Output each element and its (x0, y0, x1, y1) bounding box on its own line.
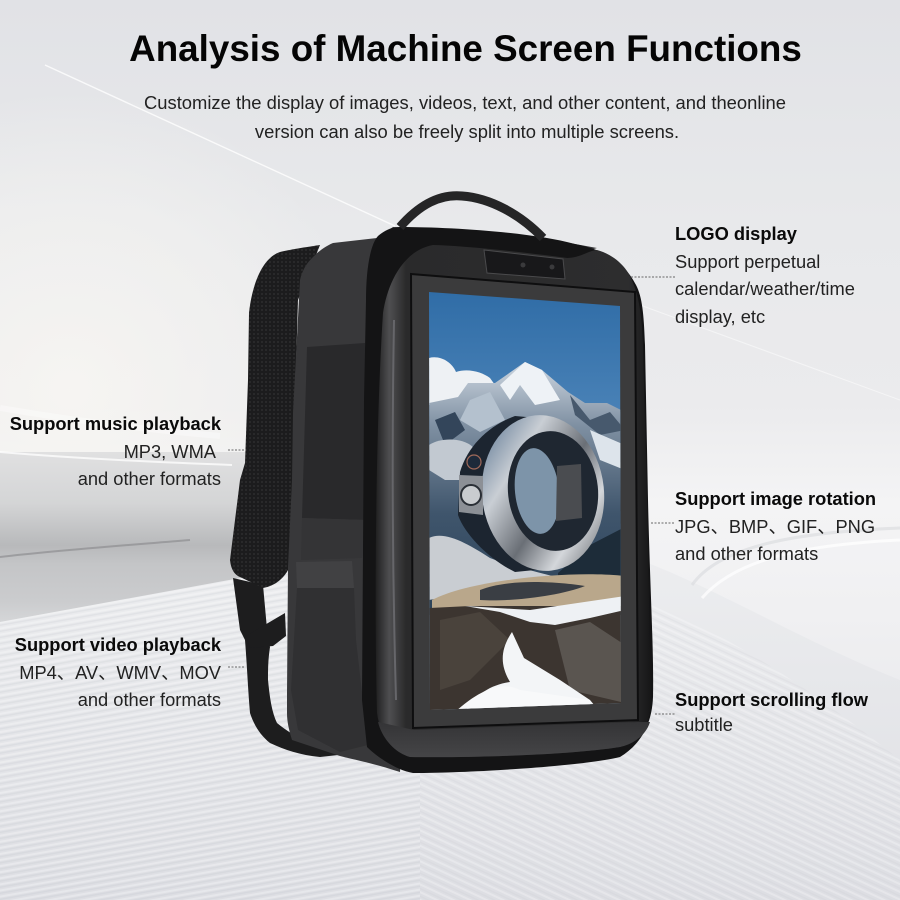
icon: lower straps (233, 578, 338, 757)
clouds (429, 357, 495, 405)
icon: bottom shell highlight (378, 722, 650, 757)
callout: logo display: LOGO display (675, 223, 797, 244)
icon: side strap tab (296, 561, 354, 588)
icon: front hard shell (376, 245, 651, 757)
panel: screen bezel (411, 274, 638, 728)
dark inner ring (502, 427, 604, 555)
callout: music playback: Support music playback (10, 413, 221, 434)
icon: soft side body (287, 227, 597, 772)
subtitle (144, 92, 786, 142)
callout: image rotation (675, 488, 876, 564)
subtitle: Customize the display of images, videos, text, and other content, and theonline (144, 92, 786, 113)
icon: reflection highlight on shell (393, 320, 396, 700)
subtitle: version can also be freely split into multiple screens. (255, 121, 679, 142)
icon: outer shell edge (362, 227, 653, 773)
callout: video playback: MP4、AV、WMV、MOV (19, 662, 221, 682)
callout: image rotation: JPG、BMP、GIF、PNG (675, 516, 875, 536)
callout: logo display: calendar/weather/time (675, 278, 855, 299)
callout: video playback: and other formats (78, 689, 221, 710)
rock (429, 606, 625, 715)
icon: logo display strip (484, 250, 565, 279)
icon: side lower pocket (301, 518, 366, 560)
callout: video playback: Support video playback (15, 634, 221, 655)
callout: scrolling subtitle (675, 689, 868, 735)
icon: shoulder strap mesh pad (230, 245, 320, 588)
illustration: backpack with screen and callout leader lines (228, 191, 675, 773)
silver face (474, 409, 612, 577)
callout: scrolling subtitle: Support scrolling flow (675, 689, 868, 710)
title: Analysis of Machine Screen Functions (129, 28, 802, 69)
leader lines (228, 277, 675, 714)
callout: music playback: MP3, WMA (124, 440, 216, 462)
callout: music playback (10, 413, 221, 489)
lower haze and trees (558, 527, 625, 590)
callout: music playback: and other formats (78, 468, 221, 489)
mountains (429, 362, 625, 615)
lens hole showing mountain (511, 446, 563, 536)
platform (432, 574, 625, 612)
callout: logo display: Support perpetual (675, 250, 820, 272)
snow (465, 596, 625, 625)
callout: image rotation: and other formats (675, 543, 818, 564)
speaker grid (556, 464, 582, 521)
panel: screen image (425, 288, 625, 715)
backpack (230, 196, 653, 773)
icon: side pocket (302, 343, 366, 520)
icon: side lower panel (291, 588, 368, 752)
icon: floating ring device (458, 409, 612, 577)
rear dark housing (458, 416, 560, 572)
callout: logo display (675, 223, 855, 327)
callout: image rotation: Support image rotation (675, 488, 876, 509)
callout: scrolling subtitle: subtitle (675, 714, 733, 735)
callout: video playback (15, 634, 221, 710)
icon: carry handle (400, 196, 543, 238)
callout: logo display: display, etc (675, 306, 765, 326)
